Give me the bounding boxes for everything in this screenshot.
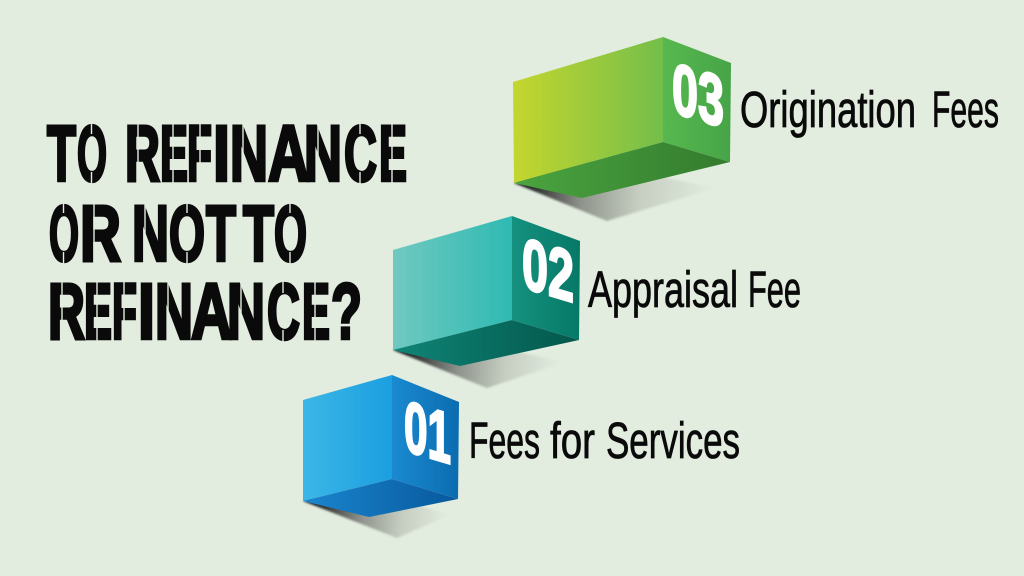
title: N — [132, 188, 169, 278]
title: E — [302, 266, 330, 356]
title: ? — [331, 266, 362, 356]
title: T — [47, 108, 76, 198]
title: T — [206, 188, 236, 278]
label: Fees for Services: Fees — [469, 412, 540, 469]
title: F — [187, 108, 212, 198]
title: E — [160, 108, 188, 198]
box 03: green step — [513, 37, 731, 221]
label: Origination Fees: Origination — [740, 81, 916, 138]
title: N — [304, 108, 342, 198]
label: Fees for Services — [469, 412, 740, 469]
title: I — [213, 108, 230, 198]
label: Fees for Services: for — [550, 412, 595, 469]
title: N — [227, 266, 265, 356]
title: N — [230, 108, 268, 198]
title: C — [267, 266, 300, 356]
number 02: 02 — [522, 221, 574, 318]
title: R — [48, 266, 85, 356]
box 02: teal step — [393, 216, 580, 388]
title: R — [125, 108, 160, 198]
title: O — [49, 188, 79, 278]
title: C — [344, 108, 377, 198]
number 03: 03 — [672, 46, 724, 143]
label: Appraisal Fee: Fee — [748, 261, 801, 318]
title: O — [77, 108, 107, 198]
title: T — [243, 188, 274, 278]
title: O — [274, 188, 307, 278]
title: A — [191, 266, 232, 356]
title: F — [112, 266, 137, 356]
box 01: blue step — [303, 375, 459, 538]
title: I — [138, 266, 155, 356]
title: E — [379, 108, 407, 198]
title: N — [155, 266, 193, 356]
title: R — [80, 188, 121, 278]
label: Fees for Services: Services — [606, 412, 740, 469]
title: A — [268, 108, 309, 198]
title — [47, 108, 407, 356]
title: E — [84, 266, 112, 356]
label: Appraisal Fee: Appraisal — [588, 261, 738, 318]
title: O — [169, 188, 205, 278]
number 01: 01 — [404, 384, 451, 480]
